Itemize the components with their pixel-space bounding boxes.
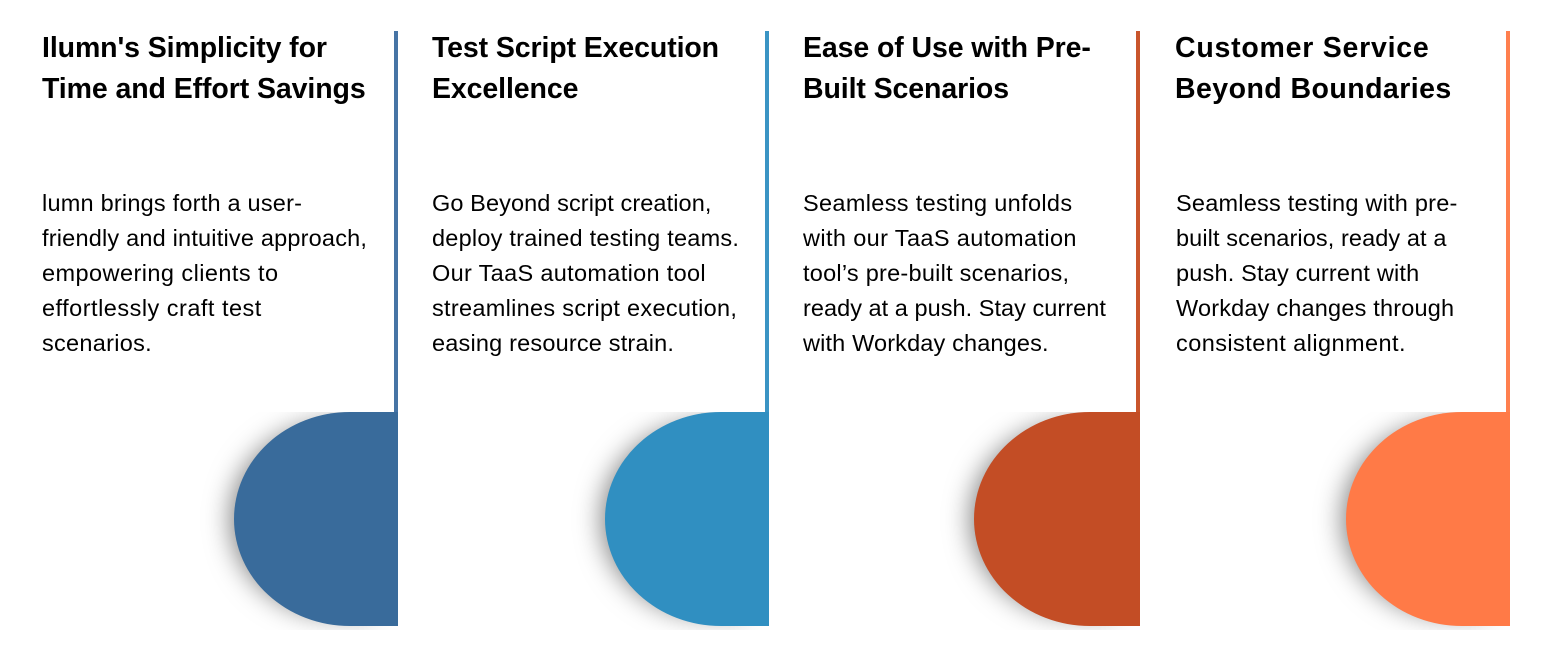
panel: execution — [432, 31, 769, 630]
text: pre-built scenarios: with Workday changes. — [803, 330, 1049, 356]
text: customer service — [1176, 190, 1458, 356]
text: execution: Go Beyond script creation, — [432, 190, 712, 216]
half circle: execution — [605, 412, 769, 626]
text: customer service: Workday changes through — [1176, 295, 1454, 321]
text: pre-built scenarios: tool’s pre-built scenarios, — [803, 260, 1069, 286]
text: execution: deploy trained testing teams. — [432, 225, 739, 251]
text: simplicity: empowering clients to — [42, 260, 279, 286]
divider bar: customer service — [1506, 31, 1510, 416]
text: simplicity: lumn brings forth a user- — [42, 190, 302, 216]
panel: pre-built scenarios — [803, 31, 1140, 630]
half circle: customer service — [1346, 412, 1510, 626]
panel: simplicity — [42, 31, 398, 630]
half circle: pre-built scenarios — [974, 412, 1140, 626]
text: pre-built scenarios: ready at a push. Stay current — [803, 295, 1106, 321]
text: pre-built scenarios: with our TaaS automation — [803, 225, 1077, 251]
divider bar: simplicity — [394, 31, 398, 416]
heading: execution — [432, 32, 719, 104]
heading: execution: Test Script Execution — [432, 32, 719, 64]
text: execution: easing resource strain. — [432, 330, 674, 356]
text: pre-built scenarios — [803, 190, 1106, 356]
divider bar: execution — [765, 31, 769, 416]
text: customer service: consistent alignment. — [1176, 330, 1406, 356]
heading: customer service — [1175, 32, 1452, 104]
half circle: simplicity — [234, 412, 398, 626]
heading: simplicity: Ilumn's Simplicity for — [42, 32, 327, 64]
text: execution: streamlines script execution, — [432, 295, 737, 321]
text: simplicity: effortlessly craft test — [42, 295, 262, 321]
text: customer service: push. Stay current with — [1176, 260, 1419, 286]
text: execution — [432, 190, 739, 356]
heading: pre-built scenarios — [803, 32, 1091, 104]
text: customer service: Seamless testing with pre- — [1176, 190, 1458, 216]
heading: pre-built scenarios: Built Scenarios — [803, 72, 1009, 104]
heading: simplicity: Time and Effort Savings — [42, 72, 366, 104]
text: pre-built scenarios: Seamless testing unfolds — [803, 190, 1072, 216]
heading: customer service: Beyond Boundaries — [1175, 72, 1452, 104]
text: simplicity — [42, 190, 367, 356]
text: simplicity: scenarios. — [42, 330, 152, 356]
text: customer service: built scenarios, ready at a — [1176, 225, 1446, 251]
heading: execution: Excellence — [432, 72, 578, 104]
heading: pre-built scenarios: Ease of Use with Pre- — [803, 32, 1091, 64]
heading: customer service: Customer Service — [1175, 32, 1430, 64]
panel: customer service — [1176, 31, 1510, 630]
text: execution: Our TaaS automation tool — [432, 260, 706, 286]
divider bar: pre-built scenarios — [1136, 31, 1140, 416]
text: simplicity: friendly and intuitive approach, — [42, 225, 367, 251]
heading: simplicity — [42, 32, 366, 104]
